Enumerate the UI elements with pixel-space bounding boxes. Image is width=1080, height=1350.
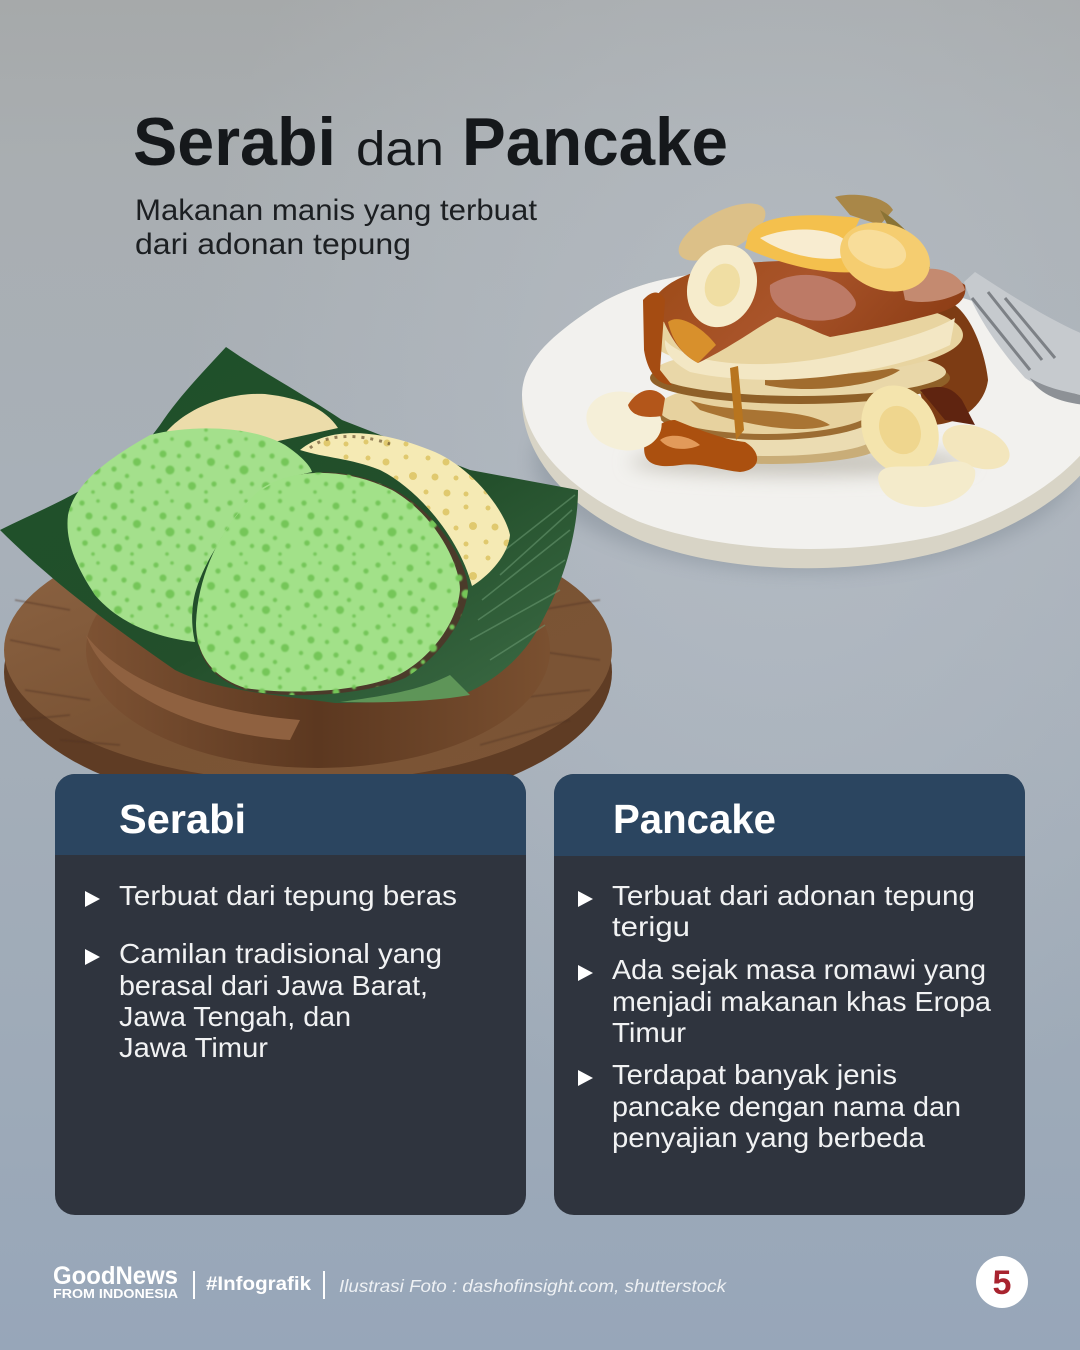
panel: pancake — [554, 774, 1025, 1215]
serabi: cream right — [300, 433, 510, 586]
banana: far right — [936, 416, 1016, 478]
bullet text: Terbuat dari tepung beras — [119, 880, 457, 911]
subtitle — [135, 194, 538, 261]
stacked pancakes — [647, 295, 963, 464]
page number badge — [976, 1256, 1028, 1308]
title — [133, 104, 728, 180]
logo: GoodNews — [53, 1262, 178, 1301]
bullet text: menjadi makanan khas Eropa — [612, 986, 991, 1017]
bullet text: Jawa Timur — [119, 1032, 268, 1063]
banana: back scrap — [835, 195, 893, 225]
photo credit: Ilustrasi Foto : dashofinsight.com, shutterstock — [339, 1276, 727, 1296]
logo: GoodNews: GoodNews — [53, 1262, 178, 1290]
serabi: green left — [67, 428, 312, 642]
title: Serabi — [133, 104, 336, 180]
footer — [53, 1256, 1028, 1308]
heading: pancake: Pancake — [613, 796, 776, 842]
bullet text: penyajian yang berbeda — [612, 1122, 925, 1153]
dark syrup behind — [910, 299, 988, 425]
title: Pancake — [462, 104, 728, 180]
plate — [522, 270, 1080, 572]
wooden board — [4, 518, 612, 812]
banana: lower right — [847, 373, 953, 487]
subtitle: Makanan manis yang terbuat — [135, 194, 538, 227]
panel header: serabi — [55, 774, 526, 855]
heading: serabi: Serabi — [119, 796, 246, 842]
hashtag: #Infografik — [206, 1274, 311, 1295]
bullet text: Jawa Tengah, dan — [119, 1001, 351, 1032]
syrup on top — [643, 260, 975, 472]
bullet text — [119, 938, 442, 1063]
page number badge: 5 — [993, 1264, 1011, 1302]
bullet icon — [85, 891, 100, 907]
bullet text: pancake dengan nama dan — [612, 1091, 961, 1122]
bullet text — [612, 954, 991, 1048]
banana: middle — [676, 235, 768, 337]
bullet text: Terdapat banyak jenis — [612, 1059, 897, 1090]
banana: top left — [670, 192, 774, 272]
bullet icon — [85, 949, 100, 965]
subtitle: dari adonan tepung — [135, 228, 411, 261]
wooden bowl — [86, 532, 550, 768]
banana slices — [581, 192, 1016, 507]
photo: pancake on plate — [522, 192, 1080, 572]
banana: bottom — [878, 461, 975, 507]
bullet icon — [578, 965, 593, 981]
bullet icon — [578, 1070, 593, 1086]
bullet text: Timur — [612, 1017, 686, 1048]
bullet text — [612, 880, 975, 942]
panel: serabi — [55, 774, 526, 1215]
banana leaf — [0, 347, 578, 703]
bullet text: Camilan tradisional yang — [119, 938, 442, 969]
serabi: green front — [190, 465, 470, 700]
panel header: pancake — [554, 774, 1025, 856]
bullet text: Ada sejak masa romawi yang — [612, 954, 986, 985]
banana: left — [581, 385, 667, 457]
bullet text: berasal dari Jawa Barat, — [119, 970, 428, 1001]
bullet text — [612, 1059, 961, 1153]
title: dan — [356, 123, 444, 176]
syrup blob on banana — [628, 390, 665, 417]
bullet text: Terbuat dari adonan tepung — [612, 880, 975, 911]
fork — [964, 272, 1080, 405]
shadow under stack — [630, 448, 970, 476]
butter and caramel — [745, 215, 860, 272]
serabi: cream back — [160, 394, 338, 452]
banana: top right — [831, 211, 939, 303]
bullet text: terigu — [612, 911, 690, 942]
bullet icon — [578, 891, 593, 907]
logo: GoodNews: FROM INDONESIA — [53, 1287, 178, 1301]
photo: serabi on wooden tray — [0, 347, 612, 812]
